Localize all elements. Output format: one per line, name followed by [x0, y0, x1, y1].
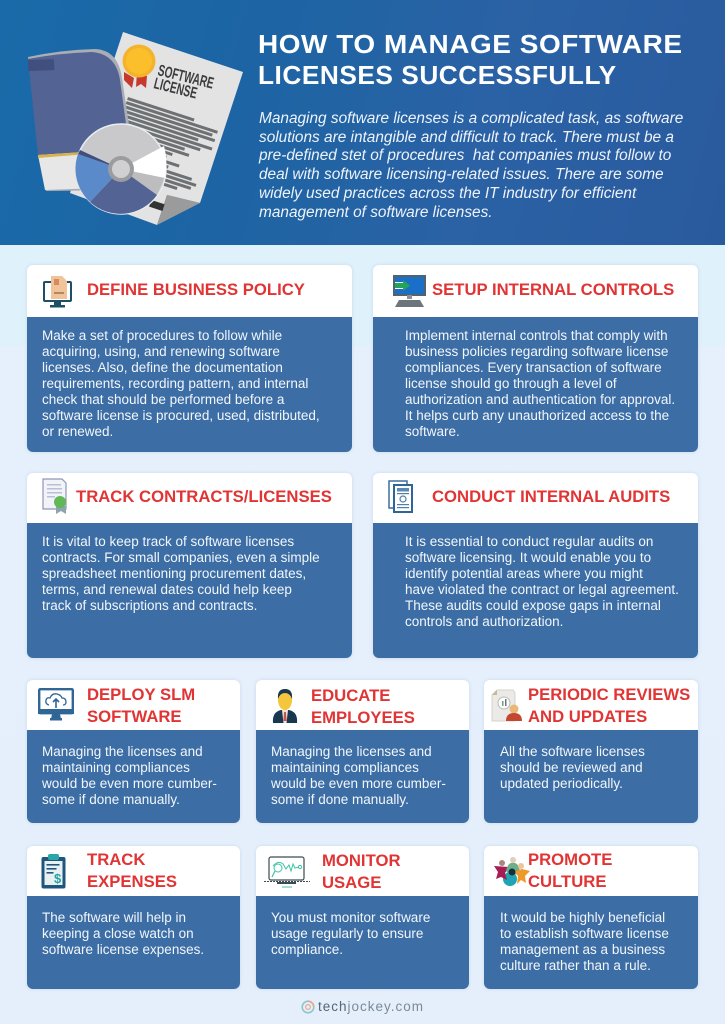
text: would be even more cumber-: [271, 776, 446, 791]
icon: computer with arrow: [393, 275, 426, 307]
text: [405, 534, 679, 629]
intro text: widely used practices across the IT industry for efficient: [259, 185, 636, 202]
text: It would be highly beneficial: [500, 910, 665, 925]
background: page tint: [0, 245, 725, 1024]
text: [271, 744, 446, 807]
text: These audits could expose gaps in internal: [405, 598, 661, 613]
text: some if done manually.: [42, 792, 180, 807]
icon: laptop with pulse: [264, 856, 310, 888]
heading: [311, 686, 415, 726]
text: culture rather than a rule.: [500, 958, 651, 973]
text: [500, 744, 645, 791]
body: [484, 730, 698, 823]
title: HOW TO MANAGE SOFTWARE: [258, 31, 683, 59]
heading: DEFINE BUSINESS POLICY: [87, 280, 305, 299]
body: [27, 730, 240, 823]
heading: EXPENSES: [87, 872, 177, 890]
text: [42, 328, 320, 439]
text: identify potential areas where you might: [405, 566, 643, 581]
illustration: software box, license and disc: SOFTWARE: [156, 62, 216, 93]
text: [42, 534, 320, 613]
icon: certificate: [42, 478, 67, 514]
panel: header banner: [0, 0, 725, 245]
text: Managing the licenses and: [42, 744, 203, 759]
icon: clipboard receipt: $: [54, 871, 62, 886]
panel: track contracts/licenses: [27, 473, 352, 658]
text: It helps curb any unauthorized access to the: [405, 408, 669, 423]
intro text: deal with software licensing-related issues. There are some: [259, 166, 664, 183]
text: All the software licenses: [500, 744, 645, 759]
body: [27, 896, 240, 989]
icon: cloud upload monitor: [38, 688, 74, 720]
panel: educate employees: [256, 680, 469, 823]
heading: USAGE: [322, 872, 381, 892]
text: licenses. Also, define the documentation: [42, 360, 283, 375]
text: check that should be performed before a: [42, 392, 284, 407]
intro text: management of software licenses.: [259, 204, 493, 221]
text: have violated the contract or legal agreement.: [405, 582, 679, 597]
heading: CULTURE: [528, 872, 606, 890]
heading: [528, 850, 612, 890]
text: [42, 910, 204, 957]
brand name: techjockey.com: [318, 999, 424, 1014]
body: [256, 896, 469, 989]
illustration: software box, license and disc: LICENSE: [152, 75, 199, 103]
panel: track expenses: [27, 846, 240, 989]
heading: SOFTWARE: [87, 706, 182, 726]
text: software.: [405, 424, 460, 439]
text: [42, 744, 217, 807]
intro text: solutions are intangible and difficult to track. There must be a: [259, 129, 674, 146]
heading: [87, 850, 177, 890]
heading: [528, 685, 690, 726]
text: [405, 328, 675, 439]
text: business policies regarding software license: [405, 344, 668, 359]
text: Managing the licenses and: [271, 744, 432, 759]
text: software license is procured, used, distributed,: [42, 408, 320, 423]
text: terms, and renewal dates could help keep: [42, 582, 292, 597]
panel: promote culture: [484, 846, 698, 989]
panel: periodic reviews and updates: [484, 680, 698, 823]
icon: employee: [272, 689, 298, 723]
intro text: Managing software licenses is a complicated task, as software: [259, 110, 683, 127]
body: [373, 523, 698, 658]
text: compliances. Every transaction of software: [405, 360, 662, 375]
text: management as a business: [500, 942, 665, 957]
heading: CONDUCT INTERNAL AUDITS: [432, 487, 670, 506]
icon: audit documents: [388, 480, 413, 513]
body: [373, 317, 698, 452]
text: It is vital to keep track of software licenses: [42, 534, 294, 549]
text: to establish software license: [500, 926, 669, 941]
text: updated periodically.: [500, 776, 623, 791]
footer logo: [301, 999, 424, 1014]
heading: TRACK: [87, 850, 145, 869]
heading: SETUP INTERNAL CONTROLS: [432, 280, 674, 299]
heading: TRACK CONTRACTS/LICENSES: [76, 487, 332, 506]
text: would be even more cumber-: [42, 776, 217, 791]
body: [27, 523, 352, 658]
title: [258, 31, 683, 90]
icon: policy monitor: [43, 276, 72, 308]
text: software license expenses.: [42, 942, 204, 957]
text: acquiring, using, and renewing software: [42, 344, 280, 359]
panel: conduct internal audits: [373, 473, 698, 658]
text: [271, 910, 430, 957]
icon: review document and person: [492, 690, 522, 722]
heading: PERIODIC REVIEWS: [528, 685, 690, 704]
text: authorization and authentication for approval.: [405, 392, 675, 407]
text: controls and authorization.: [405, 614, 563, 629]
body: [484, 896, 698, 989]
text: software licensing. It would enable you to: [405, 550, 651, 565]
text: maintaining compliances: [42, 760, 190, 775]
text: You must monitor software: [271, 910, 430, 925]
heading: AND UPDATES: [528, 706, 647, 726]
heading: MONITOR: [322, 851, 400, 870]
heading: PROMOTE: [528, 850, 612, 869]
text: spreadsheet mentioning procurement dates,: [42, 566, 306, 581]
text: Make a set of procedures to follow while: [42, 328, 282, 343]
text: license should go through a level of: [405, 376, 617, 391]
text: It is essential to conduct regular audits on: [405, 534, 653, 549]
text: Implement internal controls that comply with: [405, 328, 668, 343]
text: contracts. For small companies, even a simple: [42, 550, 320, 565]
text: requirements, recording pattern, and internal: [42, 376, 308, 391]
text: or renewed.: [42, 424, 113, 439]
text: [500, 910, 669, 973]
panel: deploy SLM software: [27, 680, 240, 823]
icon: group of people: [494, 857, 530, 886]
intro text: pre-defined stet of procedures hat companies must follow to: [259, 147, 671, 164]
text: compliance.: [271, 942, 343, 957]
illustration: software box, license and disc: [28, 32, 243, 225]
panel: define business policy: [27, 265, 352, 452]
text: should be reviewed and: [500, 760, 643, 775]
text: keeping a close watch on: [42, 926, 194, 941]
text: maintaining compliances: [271, 760, 419, 775]
heading: DEPLOY SLM: [87, 685, 195, 704]
icon: logo mark: [301, 1000, 315, 1014]
heading: EDUCATE: [311, 686, 390, 705]
heading: [87, 685, 195, 726]
panel: monitor usage: [256, 846, 469, 989]
intro text: [258, 110, 683, 221]
heading: [322, 851, 400, 892]
text: track of subscriptions and contracts.: [42, 598, 257, 613]
text: The software will help in: [42, 910, 186, 925]
title: LICENSES SUCCESSFULLY: [258, 62, 617, 90]
panel: setup internal controls: [373, 265, 698, 452]
heading: EMPLOYEES: [311, 708, 415, 726]
body: [256, 730, 469, 823]
body: [27, 317, 352, 452]
icon: clipboard receipt: [42, 854, 66, 888]
text: usage regularly to ensure: [271, 926, 423, 941]
text: some if done manually.: [271, 792, 409, 807]
